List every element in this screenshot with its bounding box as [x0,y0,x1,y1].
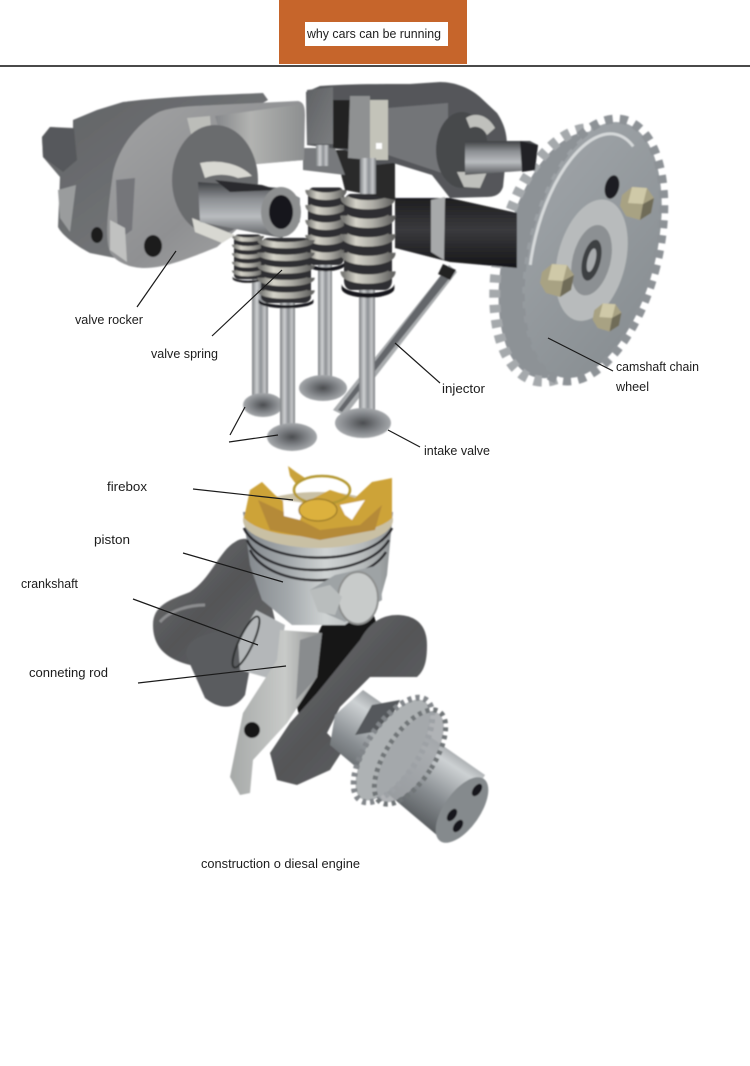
caption: construction o diesal engine [201,856,360,871]
valves [243,262,391,451]
back valve rocker [42,93,268,258]
dark camshaft [395,197,517,268]
camshaft chain wheel [471,104,688,396]
label: valve spring: valve spring [151,346,218,361]
title: why cars can be running [306,26,441,41]
label: camshaft chain wheel [615,359,699,394]
connecting rod [230,630,322,795]
label: crankshaft: crankshaft [21,576,78,591]
header rule [0,65,750,67]
piston crown flame [244,478,392,536]
label: camshaft chain wheel: wheel [615,379,649,394]
dark gap behind rod [292,610,378,718]
label: injector: injector [442,381,486,396]
crank sprockets [339,686,460,815]
white crank slit [328,658,358,687]
diesel engine illustration [153,466,499,851]
label: intake valve: intake valve [424,443,490,458]
leader lines [133,251,613,683]
valve springs [233,188,394,308]
valve train illustration [42,82,688,451]
crankshaft left webs [153,539,275,707]
label: piston: piston [94,532,130,547]
injector [333,264,457,416]
crank nose [330,690,499,851]
piston [243,466,393,625]
right valve rocker [303,82,538,200]
header banner [279,0,467,64]
label: firebox: firebox [107,479,147,494]
label: conneting rod: conneting rod [29,665,108,680]
crank journal [228,610,285,680]
label: camshaft chain wheel: camshaft chain [616,359,699,374]
label: valve rocker: valve rocker [75,312,144,327]
crankshaft right web [270,615,427,785]
front valve rocker [107,101,305,268]
